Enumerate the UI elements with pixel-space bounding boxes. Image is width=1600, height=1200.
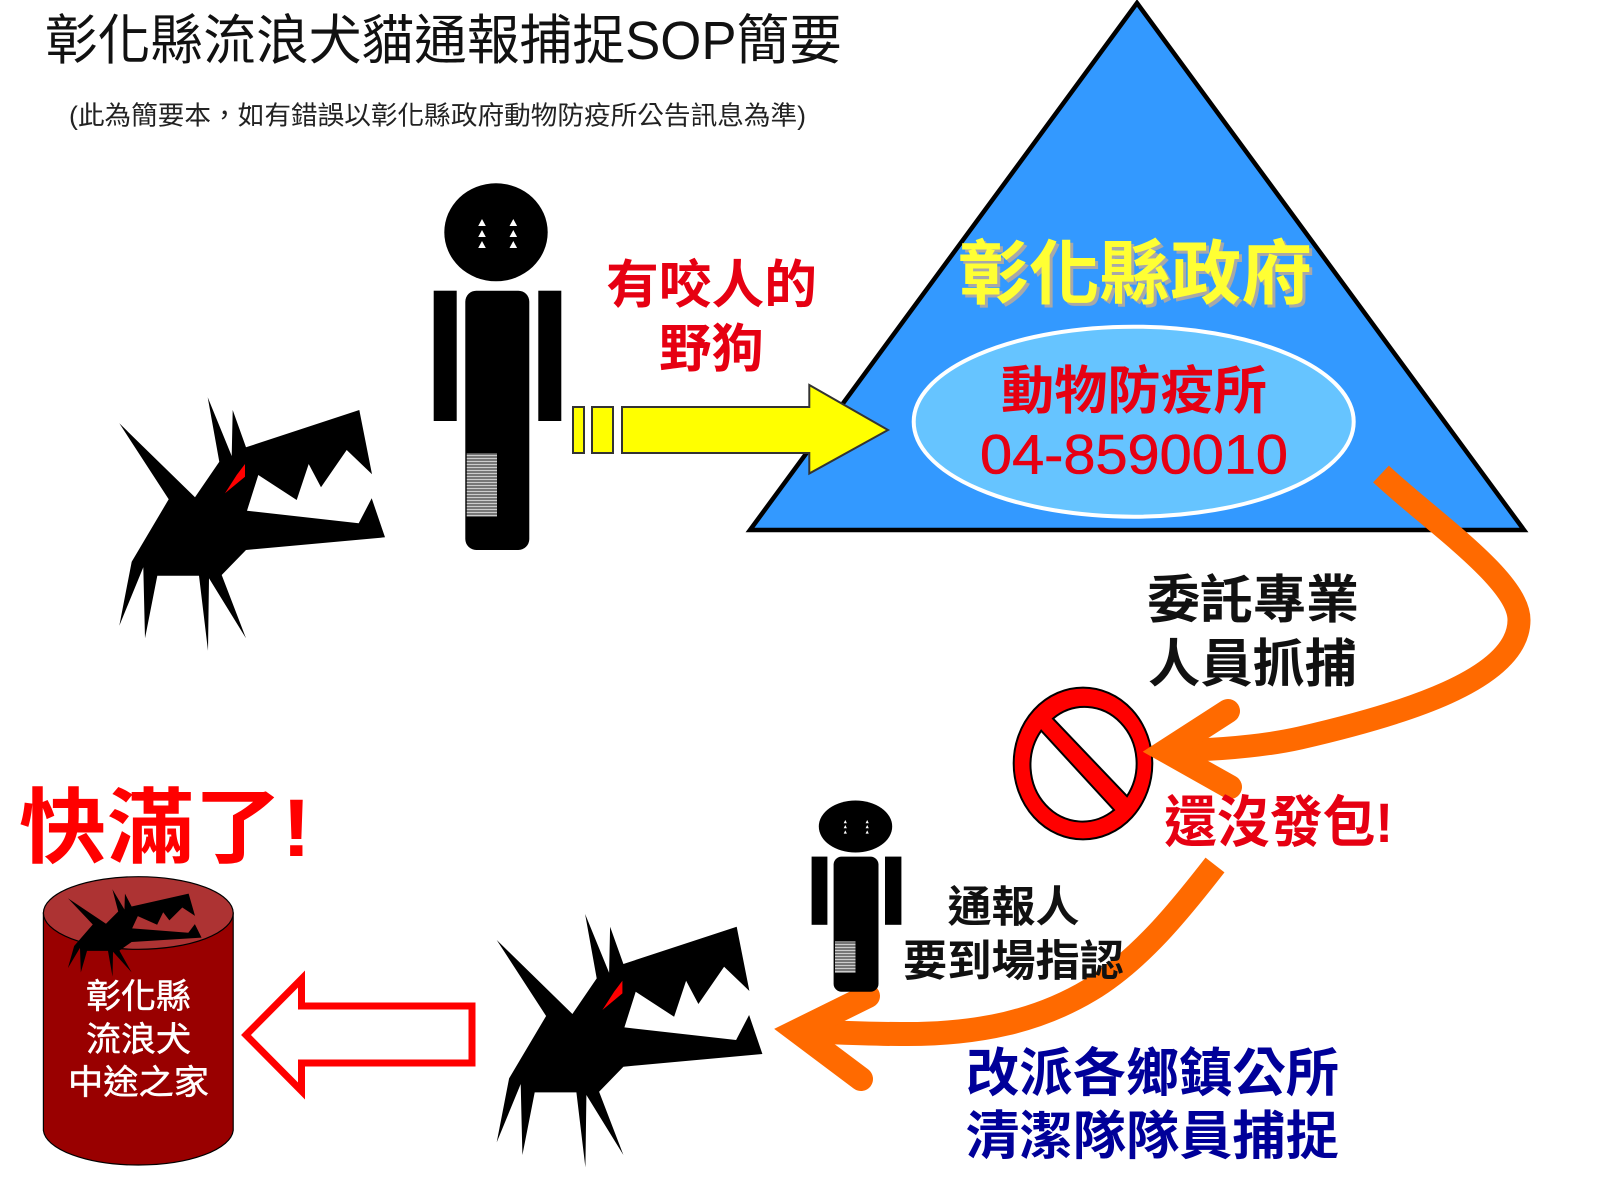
heading: county government: 彰化縣政府 bbox=[961, 238, 1315, 316]
orange arrow: government to contractors bbox=[1166, 474, 1519, 787]
dog 1: biting stray dog bbox=[119, 397, 385, 651]
label: reporter must identify on site bbox=[903, 884, 1124, 986]
title: 彰化縣流浪犬貓通報捕捉SOP簡要 bbox=[45, 11, 842, 71]
label: reassigned to township cleaning crews bbox=[966, 1044, 1339, 1166]
subtitle note: (此為簡要本，如有錯誤以彰化縣政府動物防疫所公告訊息為準) bbox=[69, 100, 806, 130]
county government triangle bbox=[750, 3, 1524, 530]
shelter name text: 中途之家 bbox=[68, 1064, 209, 1102]
label: reporter must identify on site: 要到場指認 bbox=[903, 938, 1124, 986]
orange arrow: contractors to township cleaners bbox=[797, 865, 1215, 1079]
label: biting stray dog: 有咬人的 bbox=[606, 257, 817, 315]
label: commission professional catchers: 委託專業 bbox=[1147, 572, 1359, 630]
label: reassigned to township cleaning crews: 清潔隊隊員捕捉 bbox=[966, 1107, 1339, 1166]
label: reporter must identify on site: 通報人 bbox=[948, 884, 1080, 932]
shelter name text: 流浪犬 bbox=[86, 1021, 191, 1059]
dog 2: captured dog bbox=[497, 914, 762, 1167]
shelter name text bbox=[68, 978, 209, 1102]
heading: county government: 彰化縣政府 bbox=[958, 235, 1312, 313]
label: almost full: 快滿了! bbox=[19, 783, 311, 874]
label: biting stray dog bbox=[606, 257, 817, 379]
red hollow arrow to shelter bbox=[246, 979, 472, 1091]
yellow arrow to government bbox=[573, 385, 888, 474]
ellipse: animal disease control office bbox=[914, 327, 1354, 517]
label: biting stray dog: 野狗 bbox=[659, 321, 764, 379]
label: commission professional catchers: 人員抓捕 bbox=[1148, 636, 1357, 694]
ellipse: animal disease control office: 動物防疫所 bbox=[1001, 363, 1267, 421]
shelter name text: 彰化縣 bbox=[86, 978, 191, 1016]
prohibition sign bbox=[1014, 688, 1152, 839]
person 1: reporter bbox=[434, 183, 561, 550]
person 2: reporter on site bbox=[812, 800, 901, 992]
shelter cylinder bbox=[43, 877, 233, 1165]
label: commission professional catchers bbox=[1147, 572, 1359, 694]
dog 3: dog inside shelter bbox=[68, 889, 202, 977]
label: reassigned to township cleaning crews: 改派各鄉鎮公所 bbox=[966, 1044, 1339, 1103]
label: not yet contracted: 還沒發包! bbox=[1164, 791, 1393, 854]
ellipse: animal disease control office: 04-8590010 bbox=[980, 422, 1288, 486]
